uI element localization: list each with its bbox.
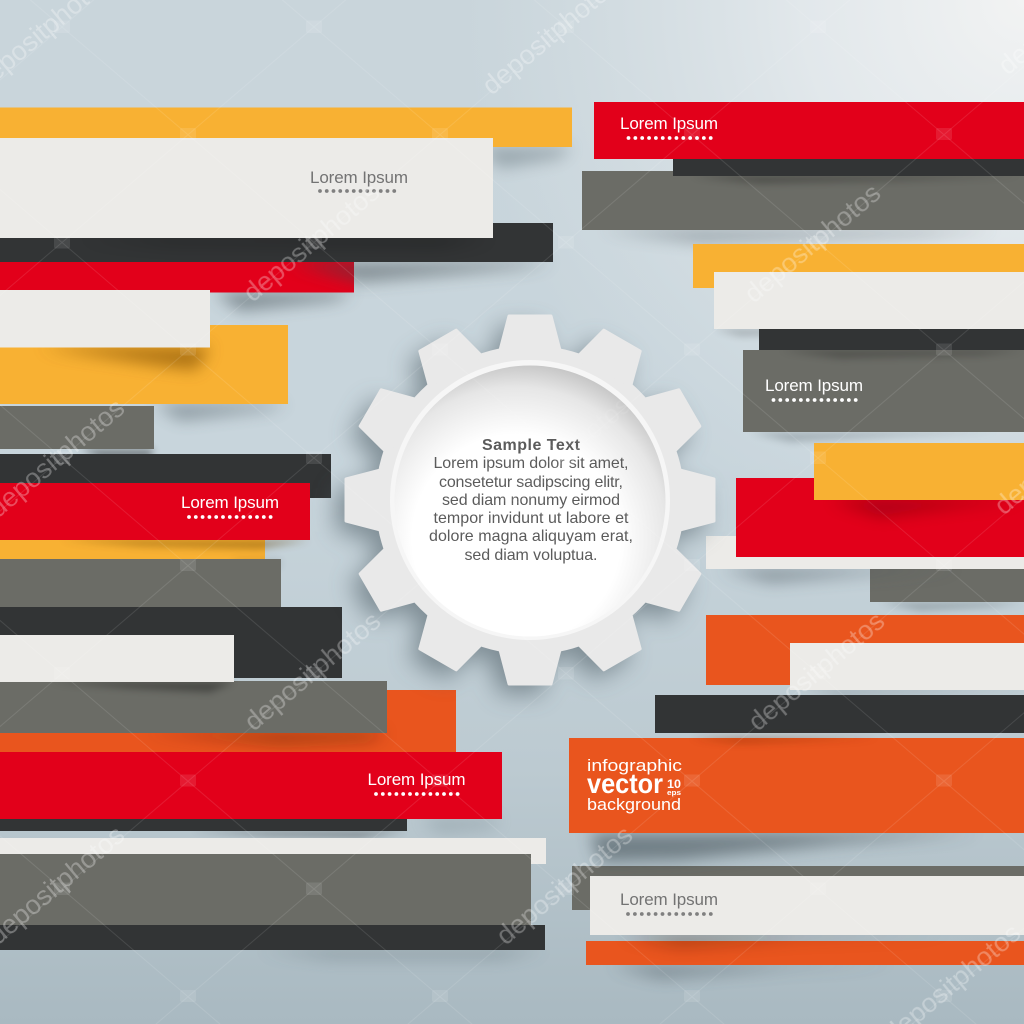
bar: yellow right — [814, 443, 1024, 516]
bar: wide gray — [0, 681, 387, 743]
bar: gray top — [582, 171, 1024, 242]
bar: white with label bottom — [590, 876, 1024, 946]
bar: dark behind red — [0, 454, 331, 498]
text block: sample text — [429, 437, 633, 564]
watermark layer: depositphotos — [490, 820, 638, 951]
text block: sample text: tempor invidunt ut labore et — [434, 510, 629, 527]
gear ring — [390, 360, 670, 640]
bar: red with label — [0, 483, 310, 549]
watermark layer: depositphotos — [488, 390, 636, 521]
bar: red strip — [0, 262, 354, 310]
logo text: infographic vector background — [587, 756, 683, 814]
bar: orange thin bottom — [586, 941, 1024, 978]
bar: red with label top — [594, 102, 1024, 159]
bar: bottom white strip — [0, 838, 546, 864]
bar: orange right — [706, 615, 1024, 685]
logo text: infographic vector background: background — [587, 795, 681, 814]
bar: gray mid — [0, 559, 281, 607]
watermark layer: depositphotos — [742, 606, 890, 737]
bar: dark right lower — [655, 695, 1024, 733]
watermark layer: depositphotos — [738, 178, 886, 309]
bar: yellow block — [0, 325, 288, 420]
bar: red right — [736, 478, 1024, 557]
panel: left bars — [0, 108, 572, 958]
label: Lorem Ipsum: Lorem Ipsum — [620, 114, 718, 133]
bar: orange behind gray — [0, 690, 456, 752]
bar: white right — [714, 272, 1024, 336]
bar: short gray — [0, 406, 154, 458]
gear body — [346, 316, 714, 684]
text block: sample text: dolore magna aliquyam erat, — [429, 528, 633, 545]
bar: red with label lower — [0, 752, 502, 832]
bar: top yellow — [0, 108, 572, 168]
bar: white strip behind red — [706, 536, 1024, 582]
bar: short white — [0, 290, 210, 370]
bar: yellow strip right — [693, 244, 1024, 288]
bar: short white lower — [0, 635, 234, 692]
gear shadow — [336, 326, 704, 694]
bar: dark large — [0, 607, 342, 678]
label: Lorem Ipsum: Lorem Ipsum — [310, 168, 408, 187]
bar: dark top — [673, 159, 1024, 183]
label: Lorem Ipsum: Lorem Ipsum — [765, 376, 863, 395]
text block: sample text: sed diam voluptua. — [464, 547, 598, 564]
bar: dark right — [759, 329, 1024, 358]
panel: right bars — [569, 102, 1024, 978]
bar: gray small right — [870, 569, 1024, 611]
bar: thin yellow — [0, 540, 265, 560]
text block: sample text: Lorem ipsum dolor sit amet, — [434, 455, 628, 472]
text block: sample text: sed diam nonumy eirmod — [442, 492, 620, 509]
logo text: infographic vector background: 10 — [667, 777, 681, 791]
text block: sample text: consetetur sadipscing elitr, — [439, 474, 623, 491]
bar: gray behind white — [572, 866, 1024, 910]
watermark layer: depositphotos — [237, 177, 385, 308]
logo text: infographic vector background: eps — [667, 790, 681, 797]
label: Lorem Ipsum: Lorem Ipsum — [181, 493, 279, 512]
bar: big orange with logo — [569, 738, 1024, 862]
text block: sample text: Sample Text — [482, 437, 581, 454]
label: Lorem Ipsum: Lorem Ipsum — [620, 890, 718, 909]
bar: bottom dark — [0, 925, 545, 958]
watermark layer: depositphotos — [238, 606, 386, 737]
bar: large white with label — [0, 138, 493, 246]
bar: dark strip — [0, 223, 553, 282]
bar: dark thin — [0, 819, 407, 838]
bar: bottom gray — [0, 854, 531, 925]
label: Lorem Ipsum: Lorem Ipsum — [368, 770, 466, 789]
logo text: infographic vector background: vector — [587, 768, 663, 799]
bar: gray with label right — [743, 350, 1024, 442]
gear with sample text — [336, 316, 714, 694]
bar: white on orange — [790, 643, 1024, 695]
logo text: infographic vector background: infographic — [587, 756, 683, 775]
